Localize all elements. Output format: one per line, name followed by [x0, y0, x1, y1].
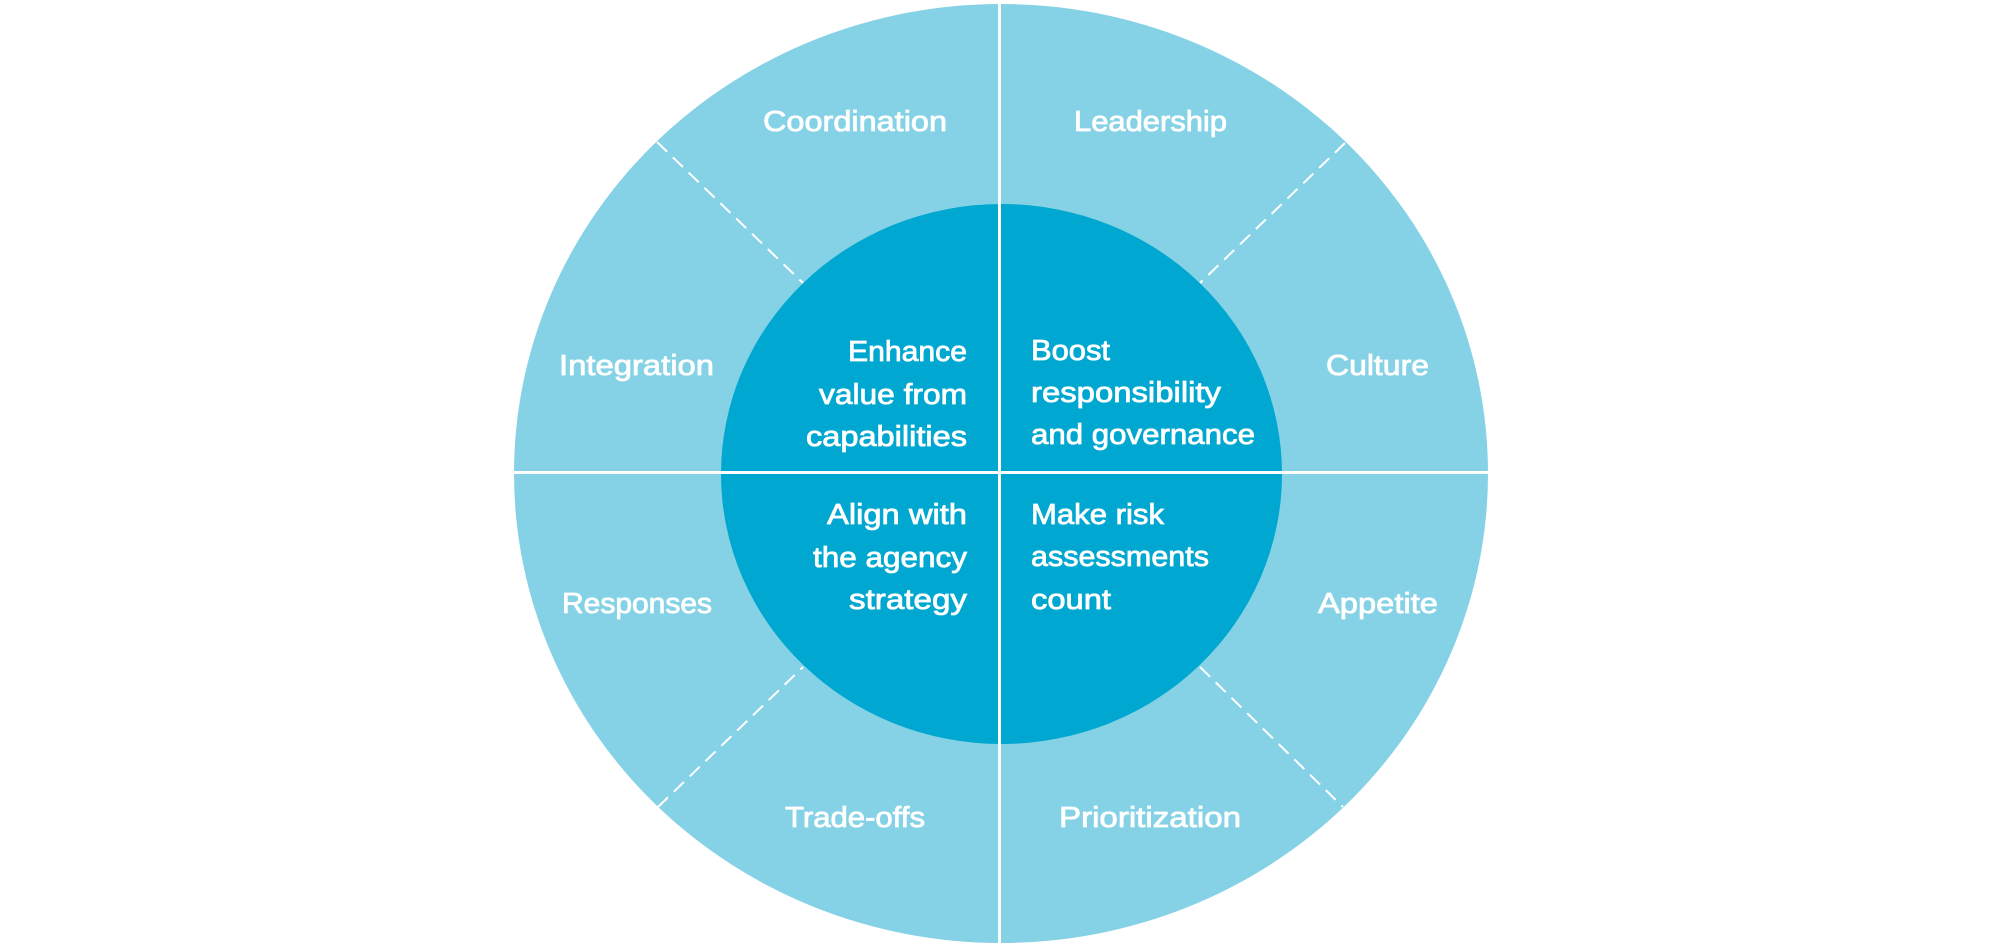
- label: Responses: Responses: [562, 588, 712, 620]
- quadrant axes: [510, 0, 1492, 944]
- inner text: Align with the agency strategy: [813, 499, 968, 616]
- inner text: Boost responsibility and governance: and governance: [1031, 419, 1255, 451]
- label: Leadership: Leadership: [1074, 106, 1227, 138]
- inner text: Boost responsibility and governance: Boost: [1031, 335, 1110, 367]
- inner text: Boost responsibility and governance: [1031, 335, 1255, 451]
- inner text: Align with the agency strategy: strategy: [849, 584, 968, 616]
- inner circle: [721, 204, 1282, 744]
- inner text: Make risk assessments count: Make risk: [1031, 499, 1165, 531]
- inner text: Align with the agency strategy: the agency: [813, 542, 968, 574]
- label: Integration: Integration: [559, 350, 714, 382]
- inner text: Make risk assessments count: assessments: [1031, 541, 1209, 573]
- inner text: Enhance value from capabilities: Enhance: [848, 336, 967, 368]
- inner text: Make risk assessments count: [1031, 499, 1209, 616]
- label: Trade-offs: Trade-offs: [785, 802, 925, 834]
- label: Prioritization: Prioritization: [1059, 802, 1241, 834]
- outer ring: [514, 4, 1488, 943]
- inner text: Make risk assessments count: count: [1031, 584, 1111, 616]
- inner text: Enhance value from capabilities: [806, 336, 967, 453]
- label: Appetite: Appetite: [1318, 588, 1438, 620]
- dashed dividers: [657, 142, 1345, 807]
- inner text: Boost responsibility and governance: responsibility: [1031, 377, 1222, 409]
- inner text: Align with the agency strategy: Align with: [827, 499, 967, 531]
- inner text: Enhance value from capabilities: value from: [819, 379, 967, 411]
- inner text: Enhance value from capabilities: capabilities: [806, 421, 967, 453]
- label: Culture: Culture: [1326, 350, 1429, 382]
- outer ring labels: [559, 106, 1438, 834]
- label: Coordination: Coordination: [763, 106, 947, 138]
